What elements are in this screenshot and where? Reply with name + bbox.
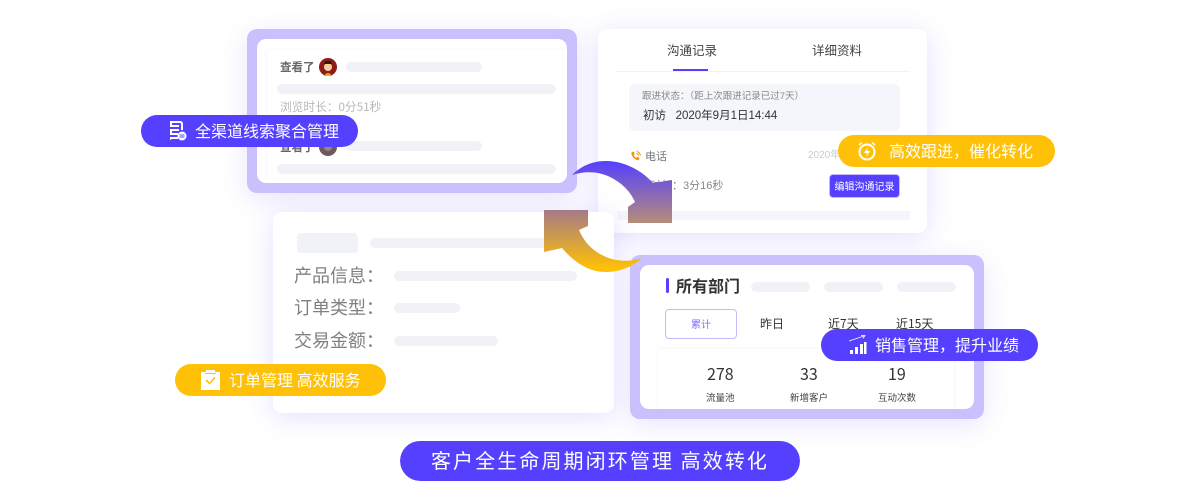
panel: lead browsing records	[247, 29, 577, 193]
placeholder bar	[277, 164, 556, 174]
button: edit record: 编辑沟通记录	[834, 178, 894, 193]
text: efficient follow-up: 高效跟进，催化转化	[889, 138, 1033, 162]
icon: clipboard check	[201, 370, 220, 390]
badge: all-channel lead aggregation	[141, 115, 358, 147]
icon: rising bars	[849, 335, 866, 354]
metric: interactions: 19	[888, 361, 906, 385]
label: new customers: 新增客户	[790, 390, 828, 404]
text: phone: 电话	[645, 148, 667, 164]
tab divider	[616, 71, 910, 72]
label: viewed 2: 查看了	[280, 139, 314, 155]
badge: sales management	[821, 329, 1038, 361]
placeholder bar	[824, 282, 883, 292]
active tab underline	[673, 69, 708, 71]
tab: cumulative	[665, 309, 737, 339]
text: follow-up status: 跟进状态：（距上次跟进记录已过7天）	[642, 91, 804, 102]
icon: lightning stopwatch	[858, 142, 876, 160]
placeholder bar	[394, 271, 577, 281]
placeholder bar	[394, 336, 498, 346]
placeholder bar	[617, 211, 910, 220]
icon: lead list	[170, 121, 186, 140]
label: interactions: 互动次数	[878, 390, 916, 404]
icon: avatar 2	[319, 147, 337, 156]
text: sales management: 销售管理，提升业绩	[875, 332, 1019, 356]
text: first visit date: 初访 2020年9月1日14:44	[643, 110, 777, 122]
inner record sheet	[267, 50, 577, 190]
text: browse duration: 浏览时长：0分51秒	[280, 98, 381, 115]
placeholder bar	[751, 282, 810, 292]
icon: phone	[631, 151, 641, 160]
label: transaction amount: 交易金额：	[294, 327, 384, 353]
label: viewed 1: 查看了	[280, 59, 314, 75]
icon: avatar 1	[319, 58, 337, 76]
placeholder block	[297, 233, 358, 253]
tab: details: 详细资料	[812, 40, 862, 59]
panel: follow-up status	[629, 84, 900, 131]
badge: order management	[175, 364, 386, 396]
heading: all departments: 所有部门	[676, 273, 740, 297]
panel: communication records	[598, 29, 927, 233]
button: edit record	[829, 174, 900, 198]
text: all-channel lead aggregation: 全渠道线索聚合管理	[195, 118, 339, 142]
placeholder bar	[897, 282, 956, 292]
tab: yesterday: 昨日	[760, 315, 784, 332]
panel: lead records inner card	[257, 39, 567, 183]
metric: traffic pool: 278	[707, 361, 734, 385]
label: order type: 订单类型：	[294, 294, 384, 320]
arrow: yellow curved to upper left	[544, 210, 642, 272]
placeholder bar	[277, 84, 556, 94]
heading marker	[666, 278, 669, 293]
badge: customer lifecycle summary	[400, 440, 800, 481]
text: record date: 2020年	[808, 150, 840, 161]
panel: department stats inner card	[640, 265, 974, 409]
placeholder bar	[346, 62, 482, 72]
placeholder bar	[370, 238, 560, 248]
placeholder bar	[346, 141, 482, 151]
badge: customer lifecycle summary: 客户全生命周期闭环管理 高效转化	[431, 445, 769, 474]
tab: last 15 days: 近15天	[896, 315, 933, 332]
label: traffic pool: 流量池	[706, 390, 735, 404]
panel: department stats	[630, 255, 984, 419]
text: call duration: 时长：3分16秒	[650, 180, 723, 192]
label: product info: 产品信息：	[294, 262, 384, 288]
text: order management: 订单管理 高效服务	[229, 367, 361, 391]
metric: new customers: 33	[800, 361, 818, 385]
badge: efficient follow-up	[838, 135, 1055, 167]
panel: metrics	[658, 349, 954, 419]
panel: order information	[273, 212, 614, 413]
placeholder bar	[394, 303, 460, 313]
tab: communication records: 沟通记录	[667, 40, 717, 59]
tab: cumulative: 累计	[691, 316, 711, 331]
tab: last 7 days: 近7天	[828, 315, 859, 332]
